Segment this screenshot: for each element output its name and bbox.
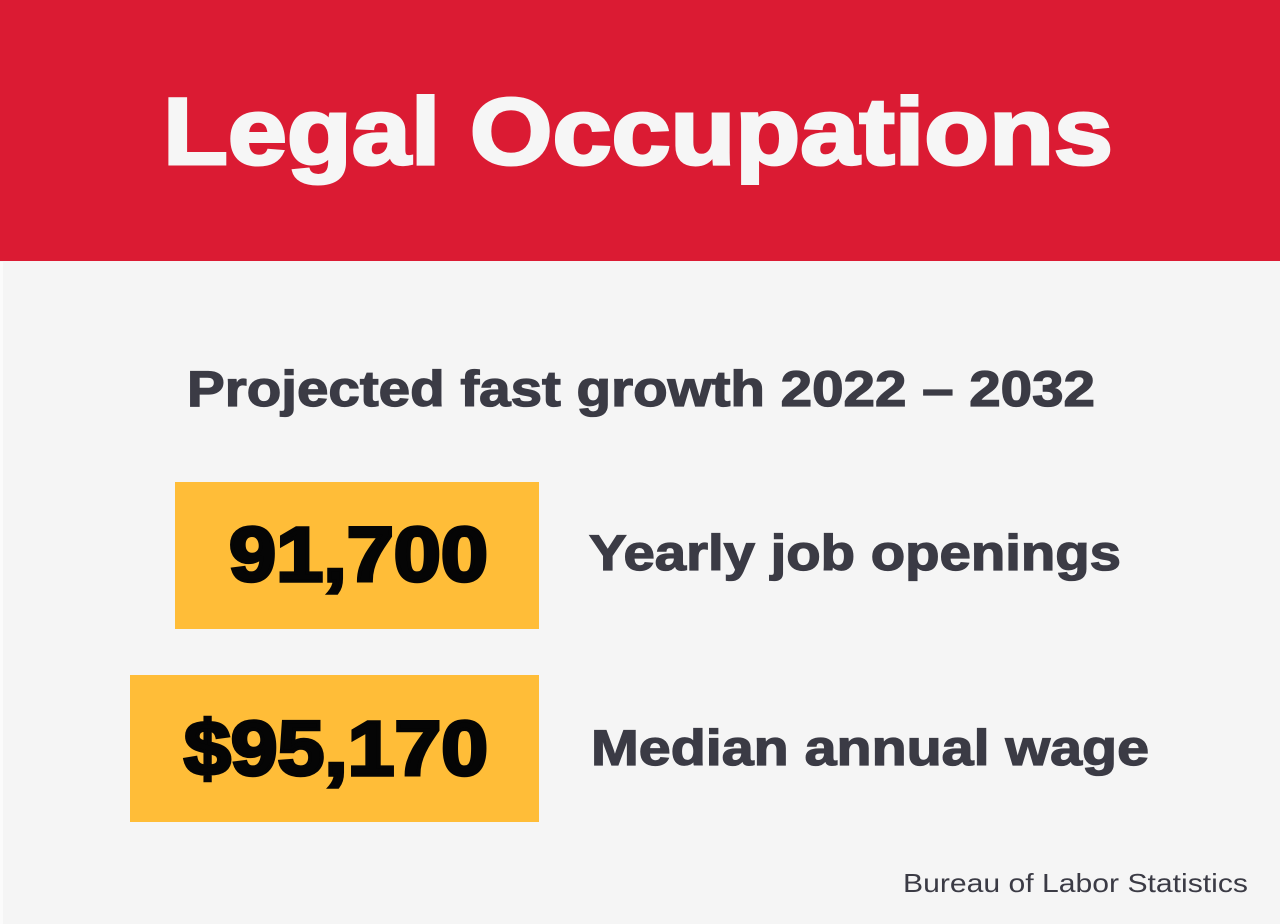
stat row: median wage — [130, 675, 1149, 822]
value box: 91,700 — [175, 482, 539, 629]
label: median annual wage: Median annual wage — [591, 720, 1149, 776]
header banner — [0, 0, 1280, 261]
value box: 91,700: 91,700 — [229, 512, 488, 598]
value box: $95,170 — [130, 675, 539, 822]
stat row: job openings — [175, 482, 1121, 629]
value box: $95,170: $95,170 — [184, 706, 488, 792]
title: Legal Occupations — [163, 79, 1113, 185]
subheading: Projected fast growth 2022 – 2032 — [187, 361, 1095, 417]
label: yearly job openings: Yearly job openings — [589, 525, 1121, 581]
source credit: Bureau of Labor Statistics — [903, 868, 1248, 898]
